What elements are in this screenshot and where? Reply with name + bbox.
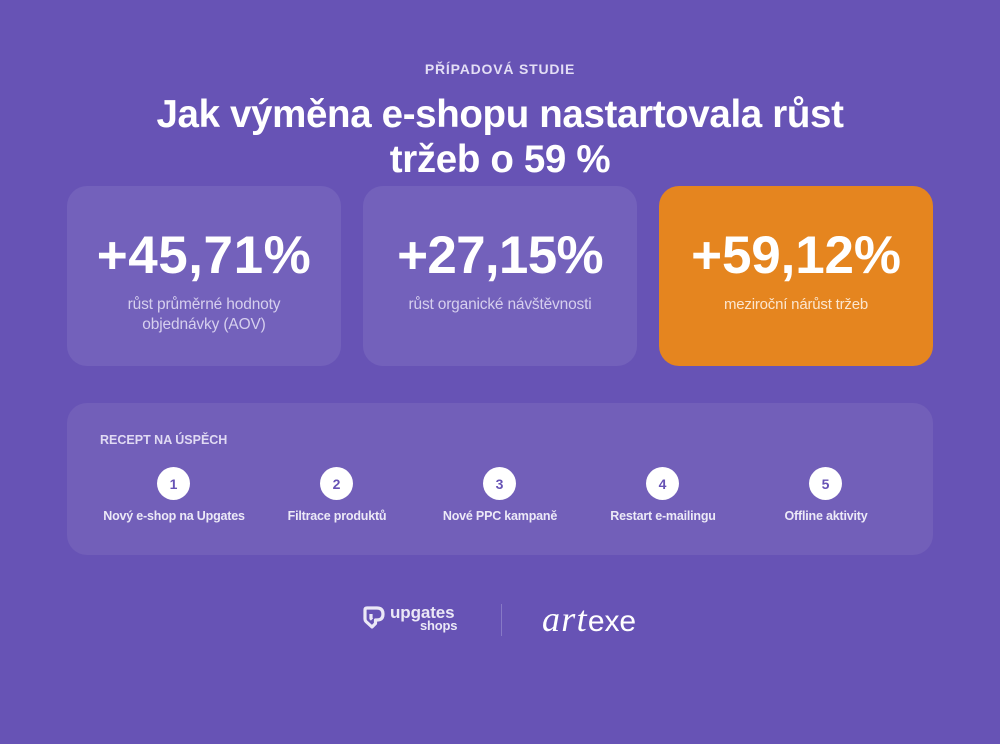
step 5 number: 5 bbox=[822, 476, 829, 492]
eyebrow: case study: PŘÍPADOVÁ STUDIE bbox=[425, 61, 575, 77]
logo: upgates shops: upgates bbox=[390, 603, 454, 622]
title: tržeb o 59 % bbox=[390, 138, 610, 181]
step 3 number bbox=[483, 467, 516, 500]
step 4 label: Restart e-mailingu bbox=[610, 509, 716, 523]
logo: upgates shops bbox=[363, 603, 457, 633]
step 4 number bbox=[646, 467, 679, 500]
stat: revenue value: +59,12% bbox=[691, 226, 901, 285]
stat: organic traffic value: +27,15% bbox=[397, 226, 603, 285]
step 2 number: 2 bbox=[333, 476, 340, 492]
heading: recipe for success: RECEPT NA ÚSPĚCH bbox=[100, 433, 227, 447]
step 3 label: Nové PPC kampaně bbox=[443, 509, 557, 523]
logo: artexe: artexe bbox=[542, 599, 636, 639]
title: Jak výměna e-shopu nastartovala růst bbox=[156, 93, 844, 136]
step 1 number: 1 bbox=[170, 476, 177, 492]
panel: recipe for success bbox=[67, 403, 933, 555]
step 2 label: Filtrace produktů bbox=[288, 509, 386, 523]
divider bbox=[501, 604, 502, 636]
stat label: AOV: objednávky (AOV) bbox=[142, 316, 266, 333]
step 3 number: 3 bbox=[496, 476, 503, 492]
stat: AOV value: +45,71% bbox=[97, 226, 311, 285]
step 5 number bbox=[809, 467, 842, 500]
step 4 number: 4 bbox=[659, 476, 666, 492]
stat label: AOV bbox=[128, 296, 280, 333]
step 1 number bbox=[157, 467, 190, 500]
panel: organic traffic bbox=[363, 186, 637, 366]
logo: upgates shops: shops bbox=[420, 618, 457, 633]
stat label: AOV: růst průměrné hodnoty bbox=[128, 296, 280, 313]
stat label: organic traffic: růst organické návštěvnosti bbox=[409, 296, 591, 313]
step 2 number bbox=[320, 467, 353, 500]
panel: revenue growth bbox=[659, 186, 933, 366]
panel: AOV growth bbox=[67, 186, 341, 366]
stat label: revenue: meziroční nárůst tržeb bbox=[724, 296, 868, 313]
step 1 label: Nový e-shop na Upgates bbox=[103, 509, 245, 523]
step 5 label: Offline aktivity bbox=[785, 509, 867, 523]
title bbox=[156, 93, 844, 181]
